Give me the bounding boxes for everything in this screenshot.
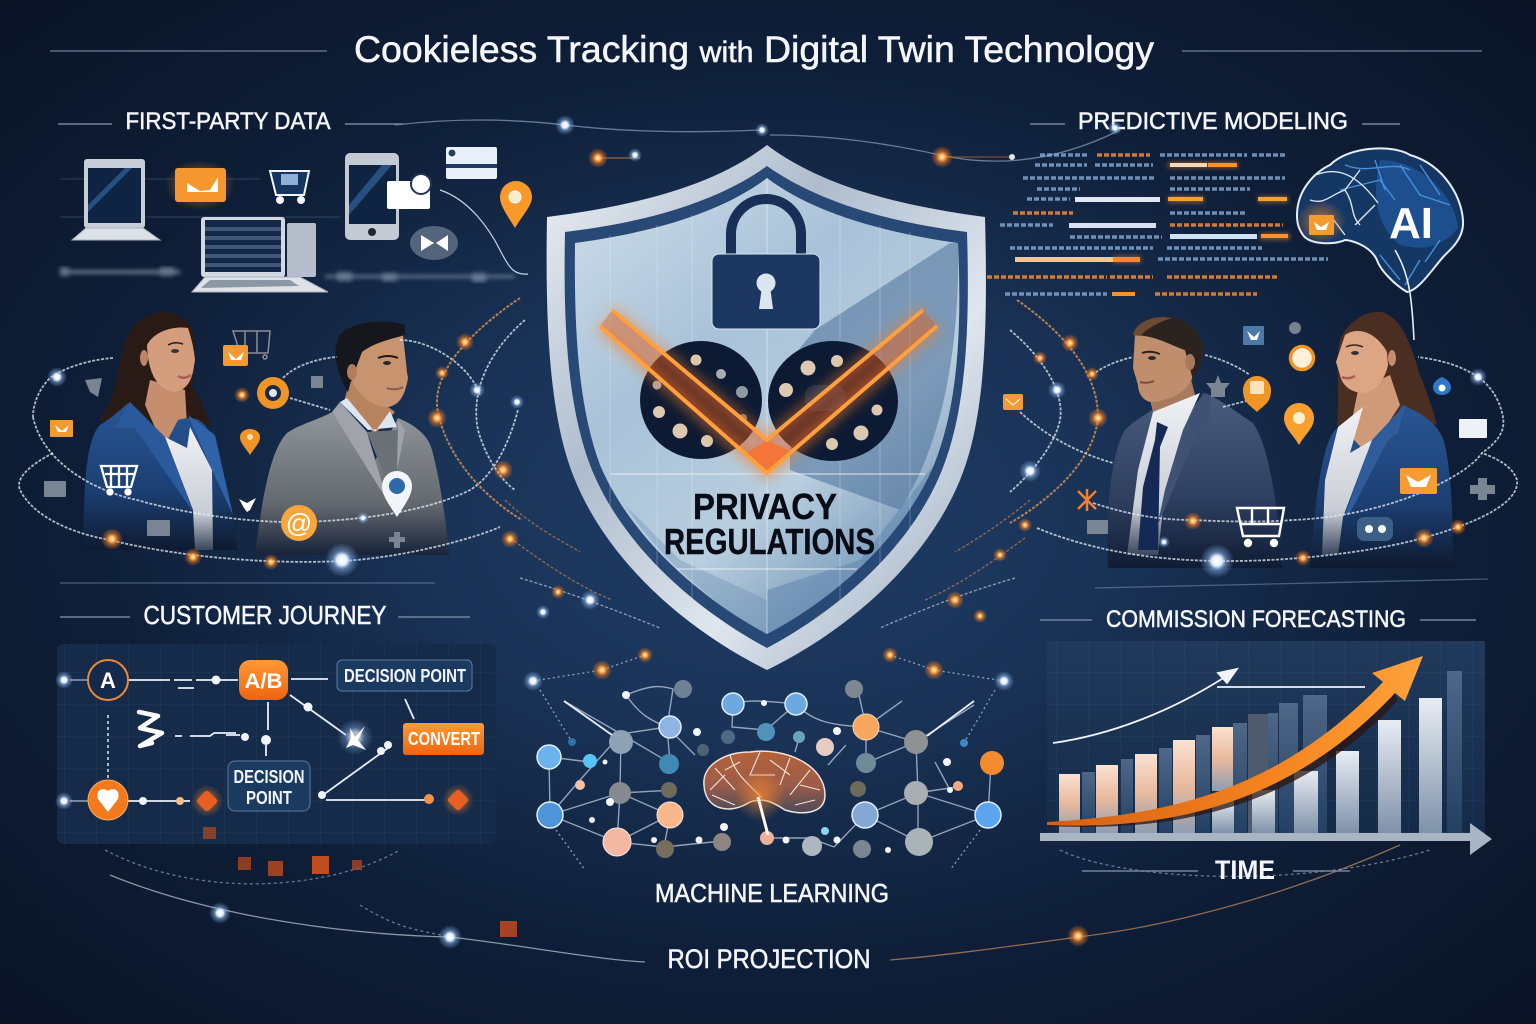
section heading: machine learning: MACHINE LEARNING	[655, 878, 889, 908]
node: A/B	[239, 660, 288, 700]
section heading: first-party data: FIRST-PARTY DATA	[126, 108, 331, 135]
icon: cart right	[1237, 508, 1284, 546]
icon: grey shapes	[44, 376, 405, 548]
orbit rings left	[19, 298, 525, 562]
long struts	[564, 701, 974, 736]
person: man left	[255, 322, 449, 555]
panel: customer journey flow	[55, 644, 496, 844]
icon: orange ring	[1290, 346, 1314, 370]
nodes blue	[537, 693, 1001, 828]
AI brain	[1296, 148, 1463, 340]
time axis arrow	[1040, 823, 1492, 855]
section heading: customer journey: CUSTOMER JOURNEY	[144, 602, 386, 630]
icon: crossed-out cookies	[600, 310, 937, 473]
back bars	[1082, 671, 1462, 833]
icon: star	[1206, 375, 1230, 397]
node: heart	[88, 780, 128, 820]
orange growth arrow	[1047, 656, 1423, 826]
orbit rings right	[1010, 300, 1517, 561]
start dots	[55, 671, 90, 810]
icon: desktop laptop	[192, 217, 328, 292]
glowing dots	[47, 115, 1487, 949]
shield label: PRIVACY	[693, 486, 837, 527]
icon: small cart	[233, 331, 270, 359]
icon: blue envelope	[1243, 326, 1264, 345]
icon: location pin white	[382, 471, 412, 517]
icon: white envelope	[1459, 419, 1487, 438]
icon: chat bubble and badge	[387, 174, 431, 209]
node: A	[88, 660, 128, 700]
icon: asterisk	[1078, 489, 1096, 511]
orbit icons right	[1003, 322, 1495, 546]
shield	[547, 145, 986, 670]
icon: blue pin	[1433, 377, 1451, 395]
icon: shopping cart	[270, 171, 309, 203]
icon: pin chat	[1243, 376, 1271, 412]
glowing sparkle	[337, 719, 373, 755]
small white nodes	[589, 691, 953, 853]
icon: padlock	[712, 199, 820, 329]
icon: card	[446, 147, 497, 179]
machine learning network	[533, 655, 1004, 870]
icon: orange envelope far left	[50, 420, 73, 437]
icon: orange map pin	[500, 181, 532, 228]
node: decision point lower: POINT	[246, 788, 292, 808]
connector curve	[440, 190, 528, 274]
icon: center orange brain	[704, 751, 825, 835]
icon: plus sign	[1470, 478, 1495, 500]
section heading: commission forecasting: COMMISSION FORECASTING	[1106, 606, 1406, 633]
predictive modeling data rows	[987, 154, 1328, 296]
white bars	[1212, 698, 1442, 833]
icon: laptop left	[72, 159, 160, 240]
icon: smartphone	[345, 153, 399, 240]
icon: at sign	[281, 505, 317, 541]
icon: white cart	[101, 466, 137, 494]
axis label: time: TIME	[1215, 855, 1275, 885]
shield label: REGULATIONS	[664, 521, 875, 562]
node: convert	[403, 723, 484, 755]
nodes peach and orange	[575, 714, 1004, 856]
icon: grey node	[1289, 322, 1301, 334]
icon: envelope orange left	[223, 345, 248, 366]
node: decision point lower: DECISION	[234, 767, 304, 787]
icon: envelope grey	[1087, 520, 1108, 534]
data stream bars	[60, 267, 515, 282]
node: convert: CONVERT	[408, 729, 480, 749]
icon: white bird	[239, 498, 256, 512]
peach bars	[1059, 727, 1233, 833]
node: A/B: A/B	[244, 670, 282, 693]
glowing accent dots	[568, 738, 968, 835]
icon: orange envelope	[165, 160, 235, 210]
first-party data device icons	[60, 147, 532, 292]
icon: orange envelope	[1400, 468, 1437, 494]
person: man right	[1107, 317, 1282, 568]
orbit icons left	[44, 331, 412, 548]
node: decision point top: DECISION POINT	[344, 666, 466, 686]
flowing connection lines	[60, 120, 1488, 962]
orange growth arrow shadow	[1047, 690, 1398, 827]
person: woman right	[1310, 312, 1453, 568]
icon: target ring	[257, 377, 289, 409]
title: Cookieless Tracking with Digital Twin Technology	[354, 29, 1154, 70]
section heading: predictive modeling: PREDICTIVE MODELING	[1078, 108, 1348, 135]
icon: at sign: @	[286, 508, 312, 538]
AI brain: AI	[1389, 199, 1433, 248]
symbol: squiggle	[139, 712, 162, 746]
node: A: A	[100, 668, 116, 693]
icon: pin small	[240, 429, 260, 455]
small dots	[139, 676, 392, 805]
thin upper trend arrow	[1053, 669, 1365, 743]
highlight bars	[1113, 162, 1290, 263]
section heading: ROI projection: ROI PROJECTION	[668, 944, 870, 974]
red squares below journey	[203, 827, 517, 937]
icon: large pin	[1284, 403, 1314, 445]
person: woman left	[83, 312, 237, 550]
icon: orange envelope small	[1003, 394, 1023, 410]
orange diamonds	[176, 784, 474, 817]
icon: bowtie chat	[410, 226, 458, 260]
node: decision point lower	[228, 761, 310, 811]
nodes grey and muted	[609, 680, 933, 858]
node: decision point top	[337, 660, 472, 691]
icon: bowtie badge	[1357, 517, 1393, 541]
panel: commission forecasting chart	[1040, 641, 1492, 885]
